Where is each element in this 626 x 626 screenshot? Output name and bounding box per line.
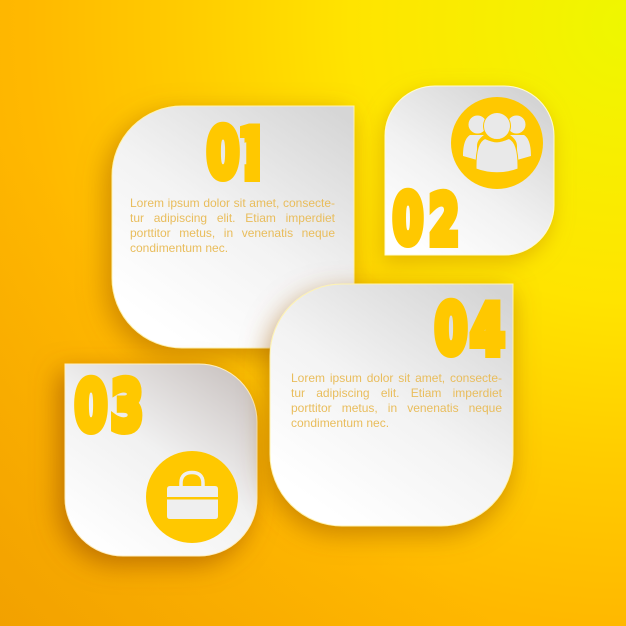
card shape 1: [112, 106, 354, 348]
card shape 4: [270, 284, 513, 526]
icon: people: [451, 97, 543, 189]
text block 4: porttitor metus, in venenatis neque: [291, 401, 502, 415]
panel 4: [248, 273, 526, 548]
number 04: 0: [435, 290, 467, 370]
number 03: 0: [75, 368, 107, 446]
icon: briefcase: [146, 451, 238, 543]
panel 2: [374, 83, 562, 271]
number 01: 1: [236, 116, 269, 194]
number 03: [75, 368, 143, 446]
number 03: 3: [111, 368, 143, 446]
number 04: 4: [470, 292, 504, 370]
text block 4: tur adipiscing elit. Etiam imperdiet: [291, 386, 502, 400]
number 01: 0: [207, 114, 239, 194]
panel 3: [45, 358, 265, 578]
text block 4: Lorem ipsum dolor sit amet, consecte-: [291, 371, 502, 385]
number 02: 0: [393, 180, 423, 260]
text block 1: porttitor metus, in venenatis neque: [130, 226, 335, 240]
text block 1: Lorem ipsum dolor sit amet, consecte-: [130, 196, 335, 210]
text block 1: condimentum nec.: [130, 241, 228, 255]
text block 4: condimentum nec.: [291, 416, 389, 430]
panel 1: [94, 99, 364, 369]
card shape 2: [385, 86, 554, 255]
text block 4: [291, 371, 502, 430]
number 01: [206, 122, 260, 182]
text block 1: [130, 196, 335, 255]
number 02: 2: [429, 182, 459, 260]
text block 1: tur adipiscing elit. Etiam imperdiet: [130, 211, 335, 225]
number 04: [435, 290, 504, 370]
card shape 3: [65, 364, 257, 556]
